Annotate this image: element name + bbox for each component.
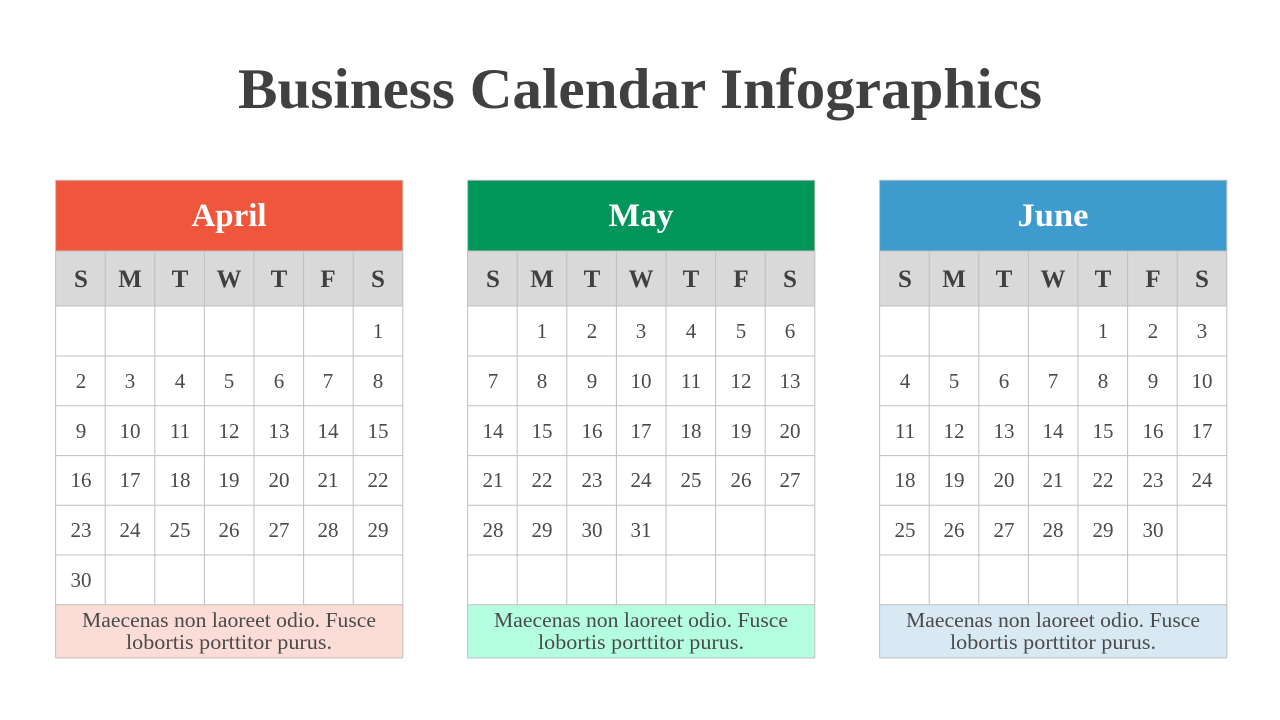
April date grid: 24: [120, 518, 141, 542]
May header band: May: [608, 198, 674, 234]
May footer note: lobortis porttitor purus.: [538, 630, 744, 654]
June date grid: 11: [895, 419, 915, 443]
May date grid: 23: [582, 468, 602, 492]
June weekday row: W: [1040, 266, 1066, 293]
May weekday row: F: [733, 266, 749, 293]
June header band: June: [1018, 198, 1088, 234]
May date grid: 30: [582, 518, 602, 542]
June date grid: 22: [1092, 468, 1114, 492]
April date grid: 30: [70, 568, 92, 592]
April date grid: 21: [318, 468, 338, 492]
April weekday row: T: [172, 266, 189, 293]
June date grid: 2: [1148, 319, 1158, 343]
April date grid: 6: [274, 369, 284, 393]
May date grid: 19: [730, 419, 752, 443]
June date grid: 30: [1142, 518, 1164, 542]
May date grid: 12: [730, 369, 752, 393]
April weekday row: S: [371, 266, 385, 293]
June date grid: 21: [1042, 468, 1064, 492]
June weekday row: T: [1095, 266, 1112, 293]
April footer note: lobortis porttitor purus.: [126, 630, 332, 654]
April footer note: [56, 605, 403, 658]
June date grid: 27: [994, 518, 1014, 542]
May date grid: 25: [680, 468, 702, 492]
June date grid: 9: [1148, 369, 1158, 393]
May date grid: 29: [532, 518, 552, 542]
May weekday row: M: [530, 266, 554, 293]
June header band: [880, 180, 1227, 251]
April weekday row: T: [271, 266, 288, 293]
June date grid: 20: [994, 468, 1014, 492]
May weekday row: T: [683, 266, 700, 293]
May date grid: 31: [630, 518, 652, 542]
June date grid: 8: [1098, 369, 1108, 393]
June date grid: 24: [1192, 468, 1213, 492]
April date grid: 23: [70, 518, 92, 542]
April date grid: 16: [70, 468, 92, 492]
April weekday row: S: [74, 266, 88, 293]
May date grid: 2: [587, 319, 597, 343]
May date grid: 18: [680, 419, 702, 443]
April weekday row: M: [118, 266, 142, 293]
June weekday row: S: [1195, 266, 1209, 293]
June weekday row: S: [898, 266, 912, 293]
May weekday row: W: [628, 266, 654, 293]
April date grid: 9: [76, 419, 86, 443]
May date grid: 9: [587, 369, 597, 393]
May date grid: 15: [532, 419, 552, 443]
May weekday row: [468, 251, 815, 306]
panel: June calendar: [880, 180, 1227, 658]
June date grid: 25: [894, 518, 916, 542]
May footer note: [468, 605, 815, 658]
June date grid: [880, 306, 1227, 605]
May date grid: 16: [582, 419, 602, 443]
April date grid: [56, 306, 403, 605]
April footer note: Maecenas non laoreet odio. Fusce: [82, 608, 376, 632]
April date grid: 1: [373, 319, 383, 343]
June date grid: 15: [1092, 419, 1114, 443]
June date grid: 7: [1048, 369, 1058, 393]
April date grid: 27: [268, 518, 290, 542]
May date grid: [468, 306, 815, 605]
June date grid: 10: [1192, 369, 1212, 393]
June date grid: 28: [1042, 518, 1064, 542]
April date grid: 14: [318, 419, 339, 443]
April date grid: 10: [120, 419, 140, 443]
April date grid: 15: [368, 419, 388, 443]
May header band: [468, 180, 815, 251]
April date grid: 28: [318, 518, 338, 542]
April date grid: 25: [170, 518, 190, 542]
May footer note: Maecenas non laoreet odio. Fusce: [494, 608, 788, 632]
April date grid: 13: [268, 419, 290, 443]
May date grid: 21: [482, 468, 504, 492]
May weekday row: S: [486, 266, 500, 293]
May date grid: 14: [482, 419, 504, 443]
June date grid: 6: [999, 369, 1009, 393]
April header band: April: [192, 198, 266, 234]
April date grid: 11: [170, 419, 190, 443]
May date grid: 27: [780, 468, 800, 492]
May date grid: 17: [630, 419, 652, 443]
June date grid: 3: [1197, 319, 1207, 343]
April date grid: 22: [368, 468, 388, 492]
June footer note: Maecenas non laoreet odio. Fusce: [906, 608, 1200, 632]
panel: May calendar: [468, 180, 815, 658]
June footer note: [880, 605, 1227, 658]
May date grid: 24: [630, 468, 652, 492]
June date grid: 4: [900, 369, 911, 393]
May date grid: 5: [736, 319, 746, 343]
June weekday row: M: [942, 266, 966, 293]
title: Business Calendar Infographics: [238, 58, 1042, 121]
April weekday row: [56, 251, 403, 306]
June date grid: 12: [944, 419, 964, 443]
April date grid: 8: [373, 369, 383, 393]
May date grid: 28: [482, 518, 504, 542]
April date grid: 26: [218, 518, 240, 542]
panel: April calendar: [56, 180, 403, 658]
April date grid: 4: [175, 369, 186, 393]
June date grid: 18: [894, 468, 916, 492]
May date grid: 13: [780, 369, 800, 393]
April date grid: 20: [268, 468, 290, 492]
June date grid: 13: [994, 419, 1014, 443]
June date grid: 26: [944, 518, 964, 542]
April date grid: 5: [224, 369, 234, 393]
May date grid: 4: [686, 319, 697, 343]
June footer note: lobortis porttitor purus.: [950, 630, 1156, 654]
April header band: [56, 180, 403, 251]
June date grid: 16: [1142, 419, 1164, 443]
April date grid: 18: [170, 468, 190, 492]
May date grid: 8: [537, 369, 547, 393]
May weekday row: T: [584, 266, 601, 293]
April date grid: 7: [323, 369, 333, 393]
June date grid: 29: [1092, 518, 1114, 542]
April weekday row: F: [320, 266, 336, 293]
May weekday row: S: [783, 266, 797, 293]
May date grid: 22: [532, 468, 552, 492]
May date grid: 1: [537, 319, 547, 343]
May date grid: 20: [780, 419, 800, 443]
May date grid: 3: [636, 319, 646, 343]
May date grid: 7: [488, 369, 498, 393]
June weekday row: T: [996, 266, 1013, 293]
June date grid: 1: [1098, 319, 1108, 343]
April date grid: 3: [125, 369, 135, 393]
May date grid: 26: [730, 468, 752, 492]
June date grid: 14: [1042, 419, 1064, 443]
April date grid: 17: [120, 468, 140, 492]
May date grid: 11: [681, 369, 701, 393]
June date grid: 23: [1142, 468, 1164, 492]
June date grid: 5: [949, 369, 959, 393]
April date grid: 2: [76, 369, 86, 393]
June date grid: 17: [1192, 419, 1212, 443]
May date grid: 6: [785, 319, 795, 343]
April weekday row: W: [216, 266, 242, 293]
June weekday row: F: [1145, 266, 1161, 293]
April date grid: 29: [368, 518, 388, 542]
May date grid: 10: [630, 369, 652, 393]
June date grid: 19: [944, 468, 964, 492]
April date grid: 12: [218, 419, 240, 443]
June weekday row: [880, 251, 1227, 306]
April date grid: 19: [218, 468, 240, 492]
